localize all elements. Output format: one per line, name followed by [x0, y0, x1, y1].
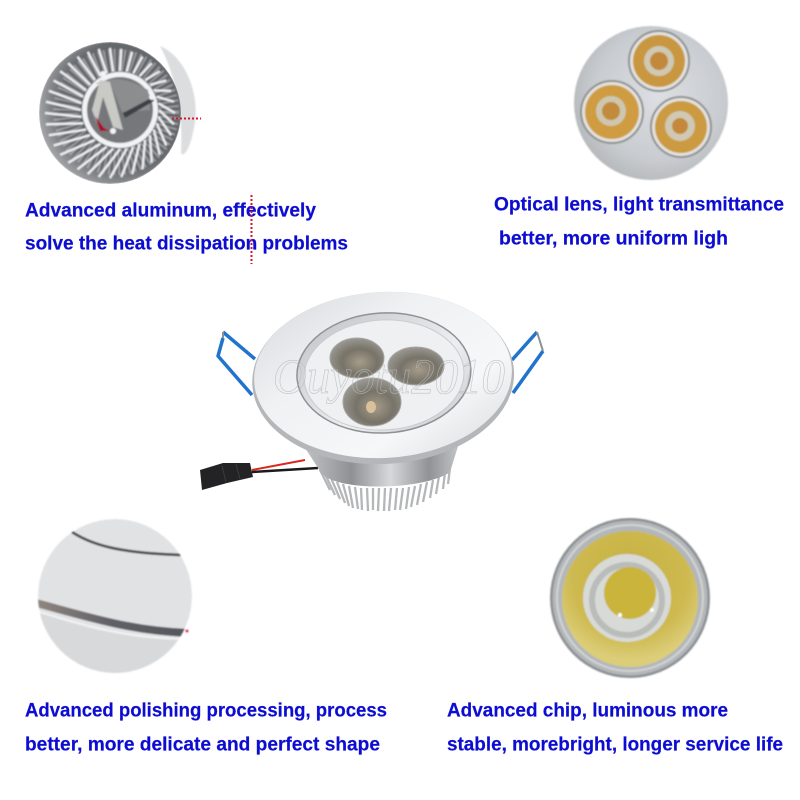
polished dark band: [36, 603, 190, 633]
heading: heat dissipation text: solve the heat dissipation problems: [25, 234, 348, 254]
heading: polishing text: better, more delicate and perfect shape: [25, 734, 380, 756]
blue spring clip left: [218, 332, 255, 395]
panel: LED chip photo: [551, 519, 709, 677]
inner ring: [294, 308, 474, 437]
heading: optical lens text: Optical lens, light transmittance: [494, 194, 784, 216]
heat sink fins: [320, 468, 450, 511]
panel: polished edge photo: [37, 518, 192, 674]
red dotted line, horizontal: [172, 118, 201, 120]
radial fins: [45, 48, 175, 178]
fin texture: [66, 62, 166, 162]
connector: [200, 463, 318, 490]
crescent behind heat sink: [160, 46, 196, 154]
heading: heat dissipation text: [25, 200, 348, 254]
thin dark groove: [72, 532, 181, 555]
red wire: [252, 460, 305, 470]
lens left: [581, 81, 643, 143]
red dotted line, vertical: [250, 195, 252, 264]
lens right: [651, 97, 711, 157]
lens top: [629, 31, 689, 91]
outer rim: [248, 285, 518, 471]
heading: chip text: stable, morebright, longer service life: [447, 734, 783, 756]
heading: optical lens text: better, more uniform ligh: [499, 228, 728, 250]
heading: chip text: [447, 700, 783, 756]
LED top right: [388, 347, 444, 385]
LED bottom: [343, 378, 401, 426]
heading: optical lens text: [494, 194, 784, 250]
LED top left: [330, 338, 384, 378]
heading: polishing text: [25, 700, 387, 756]
face plate: [250, 285, 516, 465]
panel: optical lens photo: [574, 26, 728, 180]
red speck: [186, 630, 188, 632]
collar: [305, 440, 460, 487]
panel: heat sink photo: [39, 42, 201, 184]
highlight under band: [40, 612, 190, 639]
panel: central downlight product photo: [200, 285, 543, 511]
heading: chip text: Advanced chip, luminous more: [447, 700, 728, 722]
heading: heat dissipation text: Advanced aluminum, effectively: [25, 200, 316, 222]
watermark: Ouyotu2010: [273, 348, 505, 404]
heat sink body: [39, 42, 181, 184]
blue spring clip right: [512, 332, 543, 393]
lower bevel: [40, 614, 176, 672]
heading: polishing text: Advanced polishing processing, process: [25, 700, 387, 722]
